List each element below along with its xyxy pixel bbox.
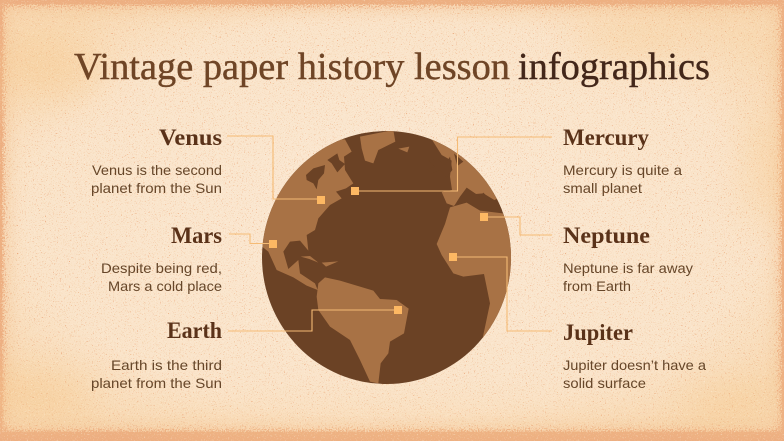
text block: Mercury: [563, 125, 682, 196]
text block: Mars: [101, 223, 222, 294]
marker: Earth: [394, 306, 402, 314]
text block: Earth: [91, 318, 222, 391]
continent: South America: [317, 277, 409, 383]
marker: Jupiter: [449, 253, 457, 261]
Canadian islands and Hudson bay: [306, 153, 345, 189]
continent: North America: [257, 139, 353, 290]
text block: Mars: Mars: [171, 223, 222, 248]
continent: Greenland: [360, 130, 395, 163]
connector: Venus: [227, 136, 321, 199]
text block: Venus: Venus is the second: [92, 162, 222, 178]
text block: Neptune: Neptune is far away: [563, 260, 693, 276]
text block: Mars: Despite being red,: [101, 260, 222, 276]
text block: Jupiter: solid surface: [563, 375, 646, 391]
marker: Mercury: [351, 187, 359, 195]
connector: Jupiter: [453, 257, 552, 331]
text block: Mercury: small planet: [563, 180, 642, 196]
text block: Venus: Venus: [159, 125, 222, 150]
title: infographics: [518, 46, 710, 88]
marker: Neptune: [480, 213, 488, 221]
text block: Venus: planet from the Sun: [91, 180, 222, 196]
text block: Earth: Earth is the third: [111, 357, 222, 373]
text block: Jupiter: Jupiter doesn’t have a: [563, 357, 706, 373]
title: Vintage paper history lesson: [74, 46, 510, 88]
text block: Mercury: Mercury: [563, 125, 649, 150]
text block: Neptune: from Earth: [563, 278, 631, 294]
title: [74, 46, 710, 88]
globe map: [262, 131, 511, 384]
text block: Neptune: [563, 223, 693, 294]
connector: Mercury: [355, 137, 552, 191]
Iceland: [398, 147, 409, 152]
connector: Earth: [228, 310, 398, 331]
text block: Venus: [91, 125, 222, 196]
text block: Mercury: Mercury is quite a: [563, 162, 682, 178]
connector: Mars: [229, 234, 273, 244]
Mediterranean: [454, 188, 502, 211]
Caribbean islands: [301, 256, 338, 267]
text block: Earth: planet from the Sun: [91, 375, 222, 391]
connector: Neptune: [484, 217, 552, 235]
marker: Venus: [317, 196, 325, 204]
continent: Africa: [436, 202, 511, 338]
text block: Earth: Earth: [167, 318, 222, 343]
text block: Jupiter: [563, 320, 706, 391]
text block: Jupiter: Jupiter: [563, 320, 633, 345]
continent: Europe and Asia edge: [432, 140, 498, 206]
text block: Mars: Mars a cold place: [108, 278, 222, 294]
marker: Mars: [269, 240, 277, 248]
British and Scandinavian seas: [448, 154, 464, 172]
text block: Neptune: Neptune: [563, 223, 650, 248]
